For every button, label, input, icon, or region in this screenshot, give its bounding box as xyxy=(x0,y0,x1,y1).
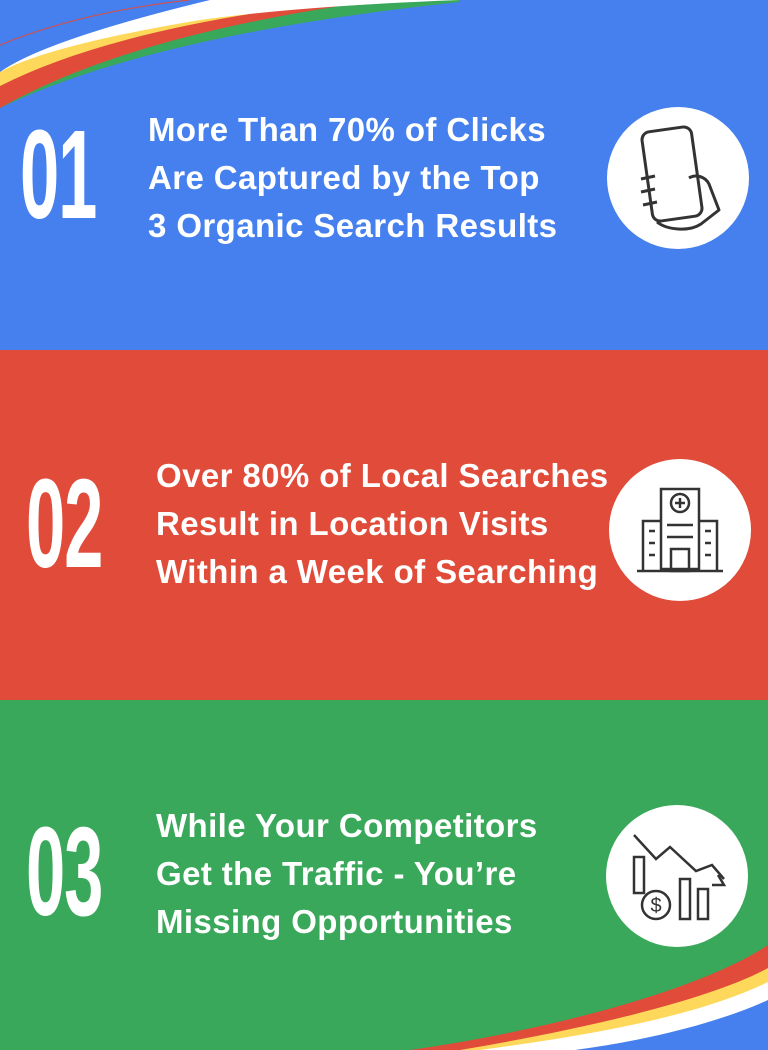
text block 3: Missing Opportunities xyxy=(156,903,513,940)
text block 3: Get the Traffic - You’re xyxy=(156,855,516,892)
number 02: 02 xyxy=(26,453,102,594)
swoosh top-left xyxy=(0,0,460,108)
panel: blue xyxy=(0,0,768,350)
icon: hospital xyxy=(609,459,751,601)
text block 3 xyxy=(156,807,538,940)
text block 2 xyxy=(156,457,608,590)
panel: green xyxy=(0,700,768,1050)
text block 2: Over 80% of Local Searches xyxy=(156,457,608,494)
text block 1: Are Captured by the Top xyxy=(148,159,540,196)
icon: declining chart xyxy=(606,805,748,947)
swoosh bottom-right xyxy=(410,945,768,1050)
number 01: 01 xyxy=(20,104,96,245)
text block 1: More Than 70% of Clicks xyxy=(148,111,546,148)
icon: declining chart: $ xyxy=(650,895,662,917)
text block 3: While Your Competitors xyxy=(156,807,538,844)
number 03: 03 xyxy=(26,801,102,942)
text block 2: Result in Location Visits xyxy=(156,505,549,542)
icon: phone in hand xyxy=(607,107,749,249)
panel: red xyxy=(0,350,768,700)
text block 1 xyxy=(148,111,557,244)
text block 1: 3 Organic Search Results xyxy=(148,207,557,244)
text block 2: Within a Week of Searching xyxy=(156,553,598,590)
